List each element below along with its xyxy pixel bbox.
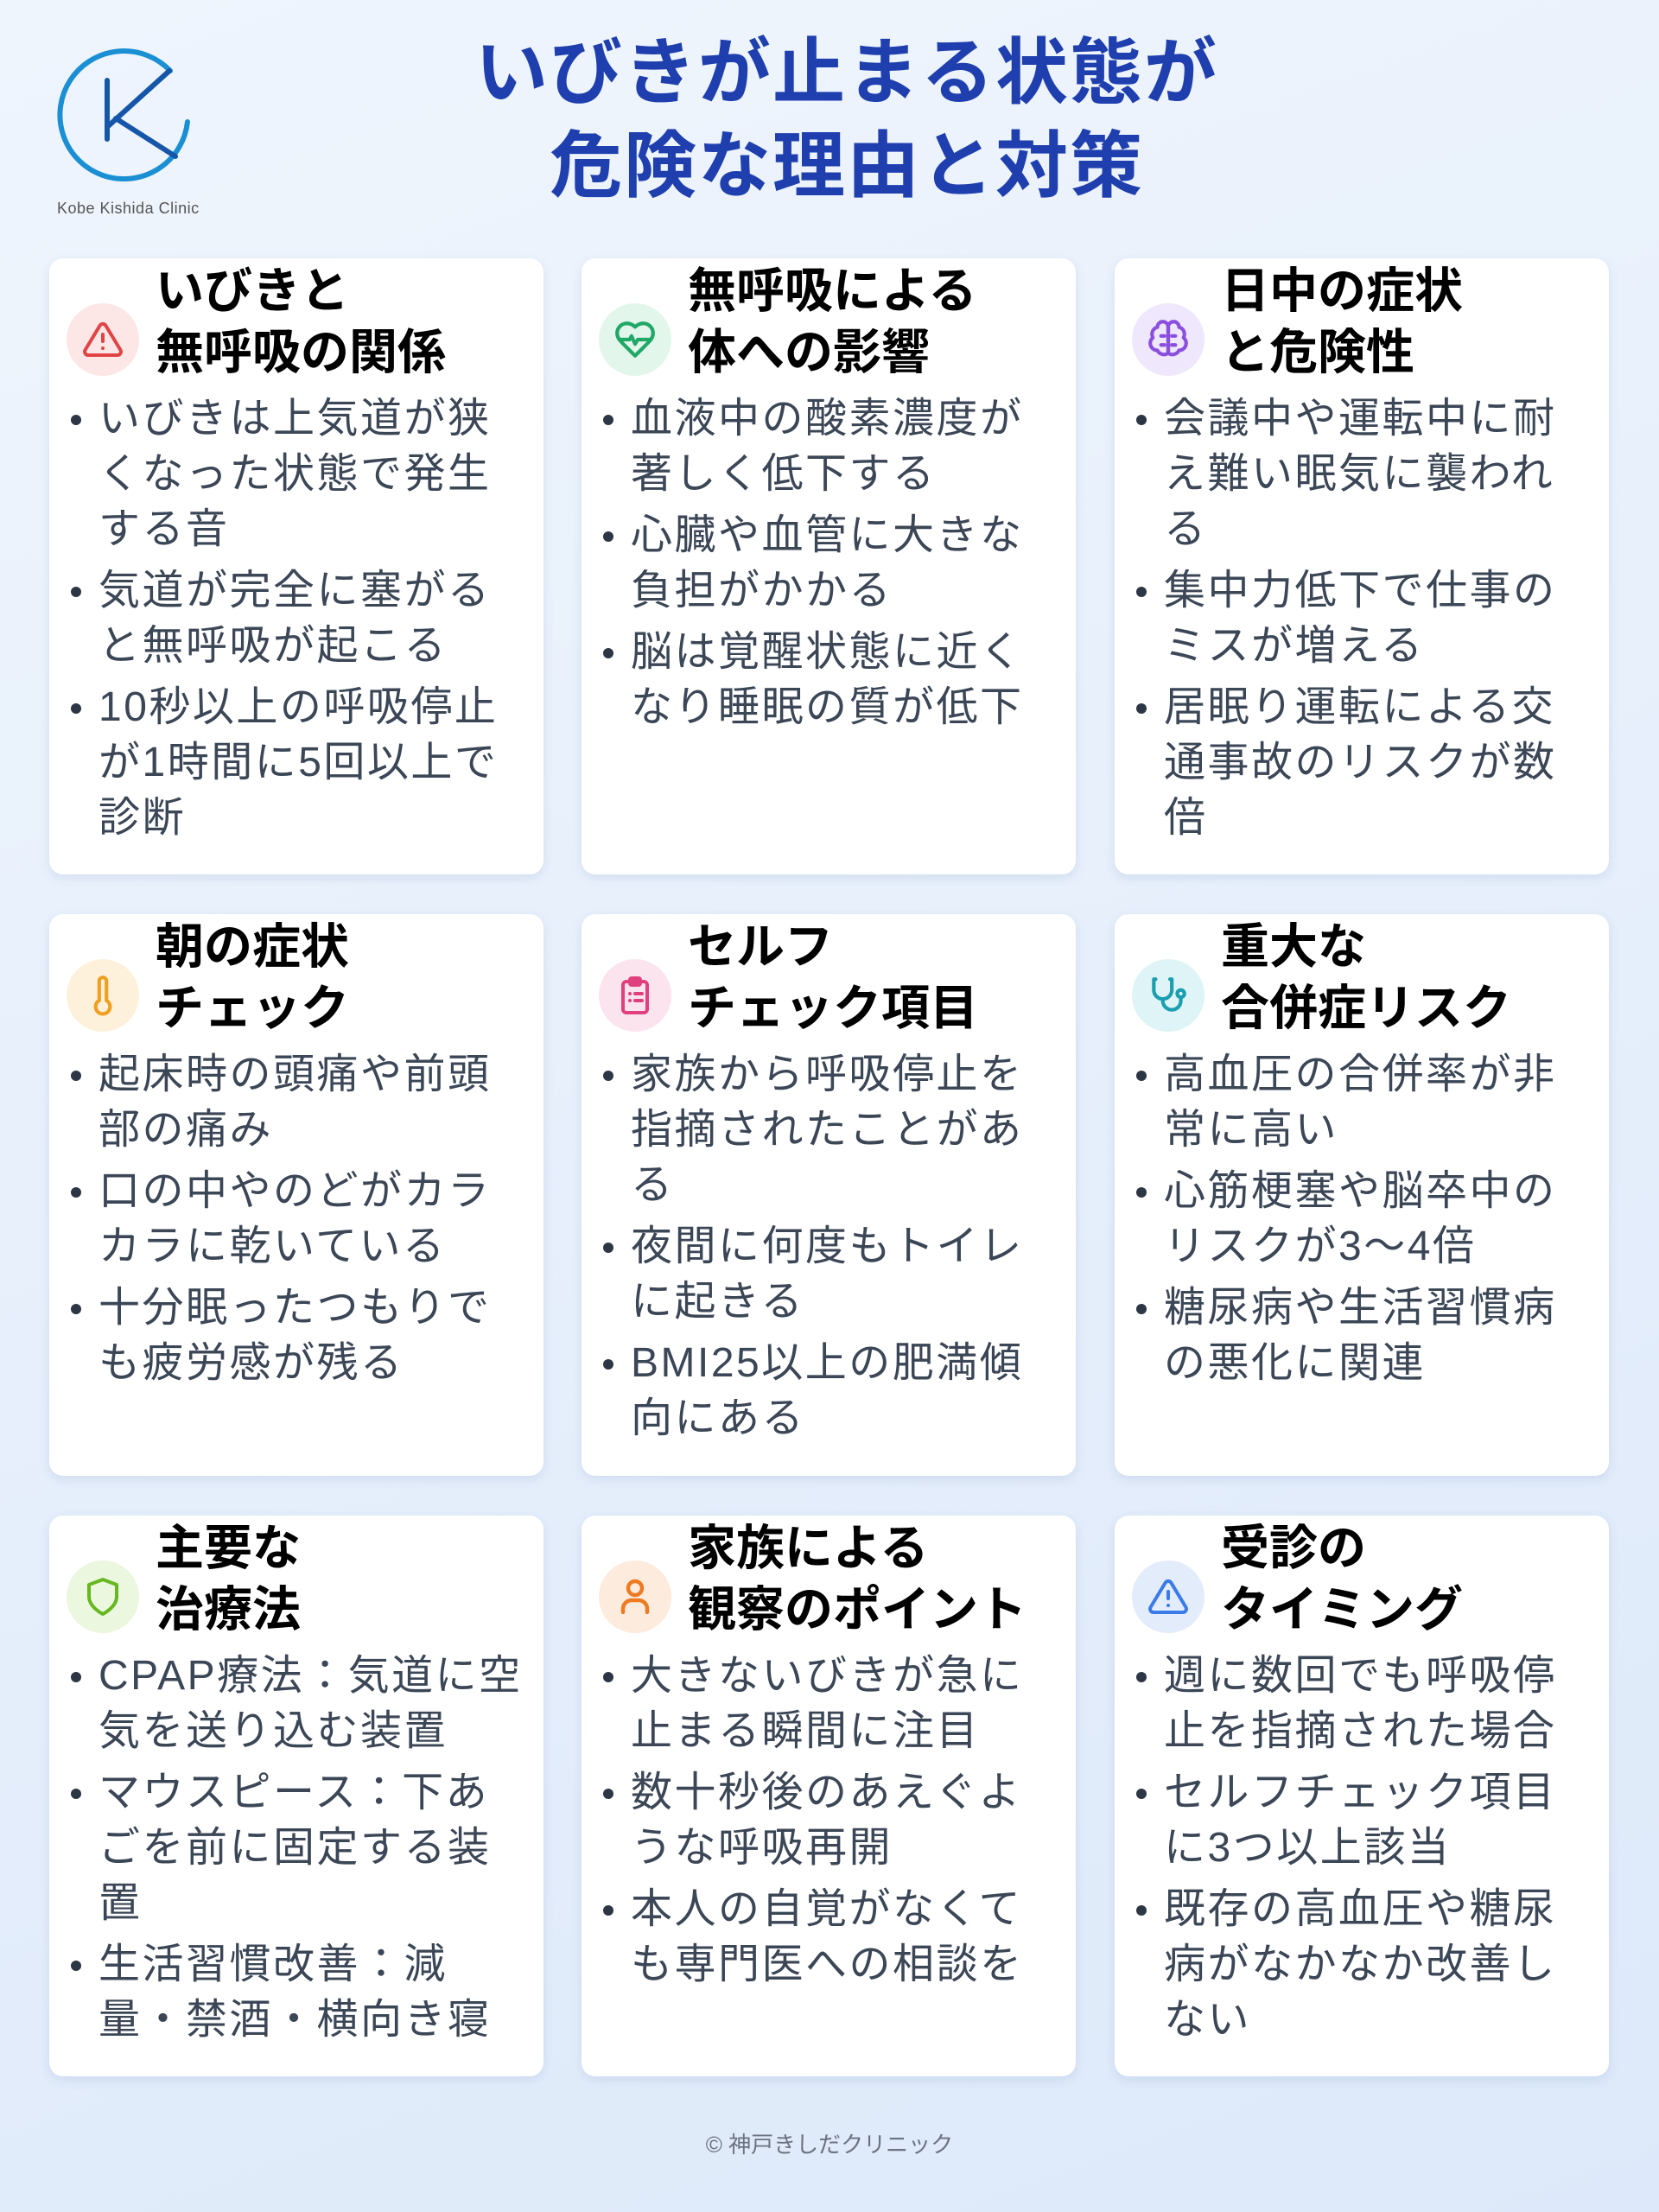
bullets: 脳は覚醒状態に近くなり睡眠の質が低下 [631,629,1024,730]
panel: consultation timing [1115,1516,1609,2076]
bullets: 生活習慣改善：減量・禁酒・横向き寝 [99,1942,492,2043]
bullets: 本人の自覚がなくても専門医への相談を [631,1886,1024,1987]
icon: warning [67,303,139,376]
bullets: 週に数回でも呼吸停止を指摘された場合 [1164,1653,1557,1754]
heading [688,1521,1027,1637]
bullets: 十分眠ったつもりでも疲労感が残る [99,1285,492,1386]
bullets: いびきは上気道が狭くなった状態で発生する音 [99,396,492,552]
heading: チェック項目 [688,981,978,1035]
bullets: 血液中の酸素濃度が著しく低下する [631,396,1024,497]
bullets [1136,396,1557,841]
heading: いびきと [156,264,349,318]
heading [688,919,978,1035]
heading: 治療法 [156,1582,301,1637]
heading: 朝の症状 [156,919,349,974]
heading [1221,1521,1463,1637]
panel: complications [1115,914,1609,1476]
heading: セルフ [688,919,833,974]
heading: 主要な [156,1521,301,1575]
bullets: 気道が完全に塞がると無呼吸が起こる [99,568,492,669]
heading: 体への影響 [688,325,930,379]
panel: family observation [582,1516,1076,2076]
bullets: 既存の高血圧や糖尿病がなかなか改善しない [1164,1886,1557,2043]
heading: 無呼吸の関係 [156,325,446,379]
icon: alert [1132,1560,1205,1633]
heading: 無呼吸による [688,264,976,318]
icon: heart pulse [599,303,671,376]
bullets: 集中力低下で仕事のミスが増える [1164,568,1557,669]
bullets: 高血圧の合併率が非常に高い [1164,1052,1557,1153]
heading: タイミング [1221,1582,1463,1637]
bullets: 心筋梗塞や脳卒中のリスクが3〜4倍 [1164,1168,1557,1269]
bullets [71,1052,492,1386]
bullets: 起床時の頭痛や前頭部の痛み [99,1052,492,1153]
bullets [603,396,1024,730]
heading [1221,919,1511,1035]
footer: © 神戸きしだクリニック [706,2132,953,2158]
logo: Kobe Kishida Clinic [57,200,200,217]
title: 危険な理由と対策 [550,125,1144,207]
heading [1221,264,1463,379]
panel: self check [582,914,1076,1476]
bullets: 家族から呼吸停止を指摘されたことがある [631,1052,1024,1208]
bullets [71,1653,523,2043]
title: いびきが止まる状態が [475,32,1218,113]
bullets: 10秒以上の呼吸停止が1時間に5回以上で診断 [99,684,498,841]
panel: snoring and apnea [49,258,543,874]
bullets: 夜間に何度もトイレに起きる [631,1224,1024,1325]
heading: 家族による [688,1521,928,1575]
bullets: 口の中やのどがカラカラに乾いている [99,1168,492,1269]
bullets: 心臓や血管に大きな負担がかかる [631,512,1024,613]
heading: 観察のポイント [688,1582,1027,1637]
heading [688,264,976,379]
panel: body effects [582,258,1076,874]
icon: clipboard [599,959,671,1032]
panel: treatments [49,1516,543,2076]
heading: 日中の症状 [1221,264,1463,318]
title [475,32,1218,207]
icon: person [599,1560,671,1633]
heading: チェック [156,981,349,1035]
icon: shield [67,1560,139,1633]
heading [156,264,446,379]
bullets: 居眠り運転による交通事故のリスクが数倍 [1164,684,1557,841]
panel: morning symptoms [49,914,543,1476]
heading: 重大な [1221,919,1366,974]
bullets: セルフチェック項目に3つ以上該当 [1164,1770,1557,1871]
bullets: CPAP療法：気道に空気を送り込む装置 [99,1653,523,1754]
heading: 受診の [1221,1521,1366,1575]
icon: thermometer [67,959,139,1032]
icon: stethoscope [1132,959,1205,1032]
bullets: マウスピース：下あごを前に固定する装置 [99,1770,492,1926]
bullets [1136,1052,1557,1386]
bullets: 糖尿病や生活習慣病の悪化に関連 [1164,1285,1557,1386]
bullets: BMI25以上の肥満傾向にある [631,1340,1023,1441]
heading: 合併症リスク [1221,981,1511,1035]
bullets: 会議中や運転中に耐え難い眠気に襲われる [1164,396,1557,552]
bullets [71,396,498,841]
heading [156,919,349,1035]
icon: brain [1132,303,1205,376]
heading: と危険性 [1221,325,1414,379]
bullets: 大きないびきが急に止まる瞬間に注目 [631,1653,1024,1754]
heading [156,1521,301,1637]
logo [57,48,200,217]
bullets [603,1052,1024,1441]
bullets [603,1653,1024,1987]
bullets [1136,1653,1557,2043]
panel: daytime symptoms [1115,258,1609,874]
bullets: 数十秒後のあえぐような呼吸再開 [631,1770,1022,1871]
